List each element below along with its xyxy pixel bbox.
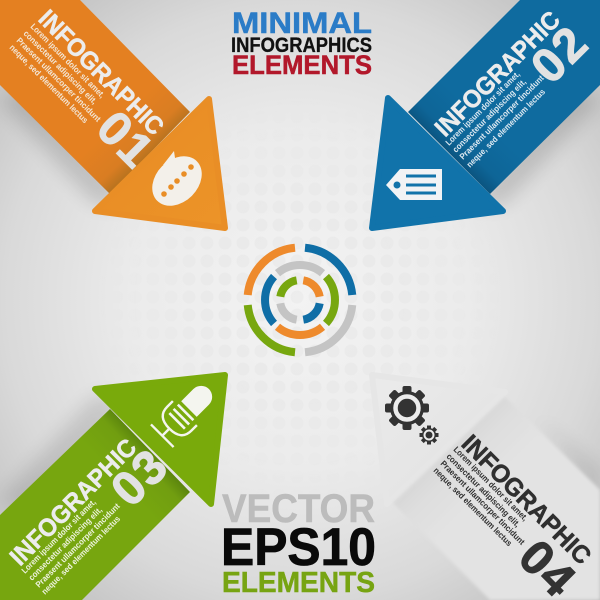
centre concentric ring bbox=[248, 248, 352, 352]
arrowhead 04 bbox=[372, 375, 505, 504]
body text 01: neque, sed elementum lectus bbox=[8, 42, 90, 125]
body text 03: Lorem ipsum dolor sit amet, bbox=[19, 497, 98, 575]
band 02 bbox=[408, 0, 600, 194]
body text 02: Lorem ipsum dolor sit amet, bbox=[443, 69, 522, 147]
arrow 03: green bbox=[0, 375, 225, 600]
arrowhead 02 bbox=[372, 98, 503, 228]
body text 03: neque, sed elementum lectus bbox=[39, 514, 122, 596]
inner ring bbox=[280, 280, 320, 320]
body text 03: consectetur adipiscing elit, bbox=[26, 505, 104, 582]
body text 01: consectetur adipiscing elit, bbox=[22, 28, 99, 106]
number 03: 03 bbox=[101, 439, 179, 517]
arrowhead 01 bbox=[95, 99, 225, 228]
footer: vector eps10 elements: EPS10 bbox=[221, 518, 376, 577]
title: minimal infographics elements: ELEMENTS bbox=[232, 50, 372, 80]
arrowhead 03 bbox=[95, 375, 225, 504]
title: minimal infographics elements: INFOGRAPHICS bbox=[231, 34, 372, 57]
arrow 04: grey bbox=[372, 375, 600, 600]
footer: vector eps10 elements bbox=[221, 487, 376, 599]
icon: price tag bbox=[386, 169, 442, 200]
body text 02: neque, sed elementum lectus bbox=[464, 87, 547, 169]
body text 02: consectetur adipiscing elit, bbox=[450, 77, 528, 154]
body text 04: consectetur adipiscing elit, bbox=[445, 451, 522, 529]
body text 04: neque, sed elementum lectus bbox=[432, 465, 514, 548]
footer: vector eps10 elements: ELEMENTS bbox=[222, 567, 375, 599]
outer ring bbox=[248, 248, 352, 352]
body text 04: Lorem ipsum dolor sit amet, bbox=[452, 444, 530, 523]
number 02: 02 bbox=[521, 16, 599, 94]
band 03 bbox=[0, 409, 190, 600]
body text 02: Praesent ullamcorper tincidunt bbox=[457, 73, 546, 161]
body text 01: Lorem ipsum dolor sit amet, bbox=[29, 21, 107, 100]
icon: speech bubble bbox=[142, 146, 212, 216]
arrow 01: orange bbox=[0, 0, 225, 228]
heading 02: INFOGRAPHIC bbox=[429, 6, 566, 142]
heading 03: INFOGRAPHIC bbox=[4, 433, 142, 571]
band 01 bbox=[0, 0, 190, 194]
band 04 bbox=[393, 397, 600, 600]
icon: microphone bbox=[150, 377, 221, 448]
middle ring bbox=[265, 265, 335, 335]
body text 04: Praesent ullamcorper tincidunt bbox=[439, 458, 527, 547]
number 01: 01 bbox=[86, 101, 164, 179]
icon: gears bbox=[385, 386, 438, 444]
arrow 02: blue bbox=[372, 0, 600, 228]
large gear bbox=[385, 386, 429, 430]
small gear bbox=[420, 426, 438, 444]
heading 04: INFOGRAPHIC bbox=[456, 429, 596, 570]
title: minimal infographics elements: MINIMAL bbox=[232, 7, 372, 40]
body text 01: Praesent ullamcorper tincidunt bbox=[15, 35, 103, 124]
body text 03: Praesent ullamcorper tincidunt bbox=[33, 501, 122, 589]
title: minimal infographics elements bbox=[231, 7, 372, 80]
footer: vector eps10 elements: VECTOR bbox=[222, 487, 375, 531]
heading 01: INFOGRAPHIC bbox=[33, 4, 169, 141]
